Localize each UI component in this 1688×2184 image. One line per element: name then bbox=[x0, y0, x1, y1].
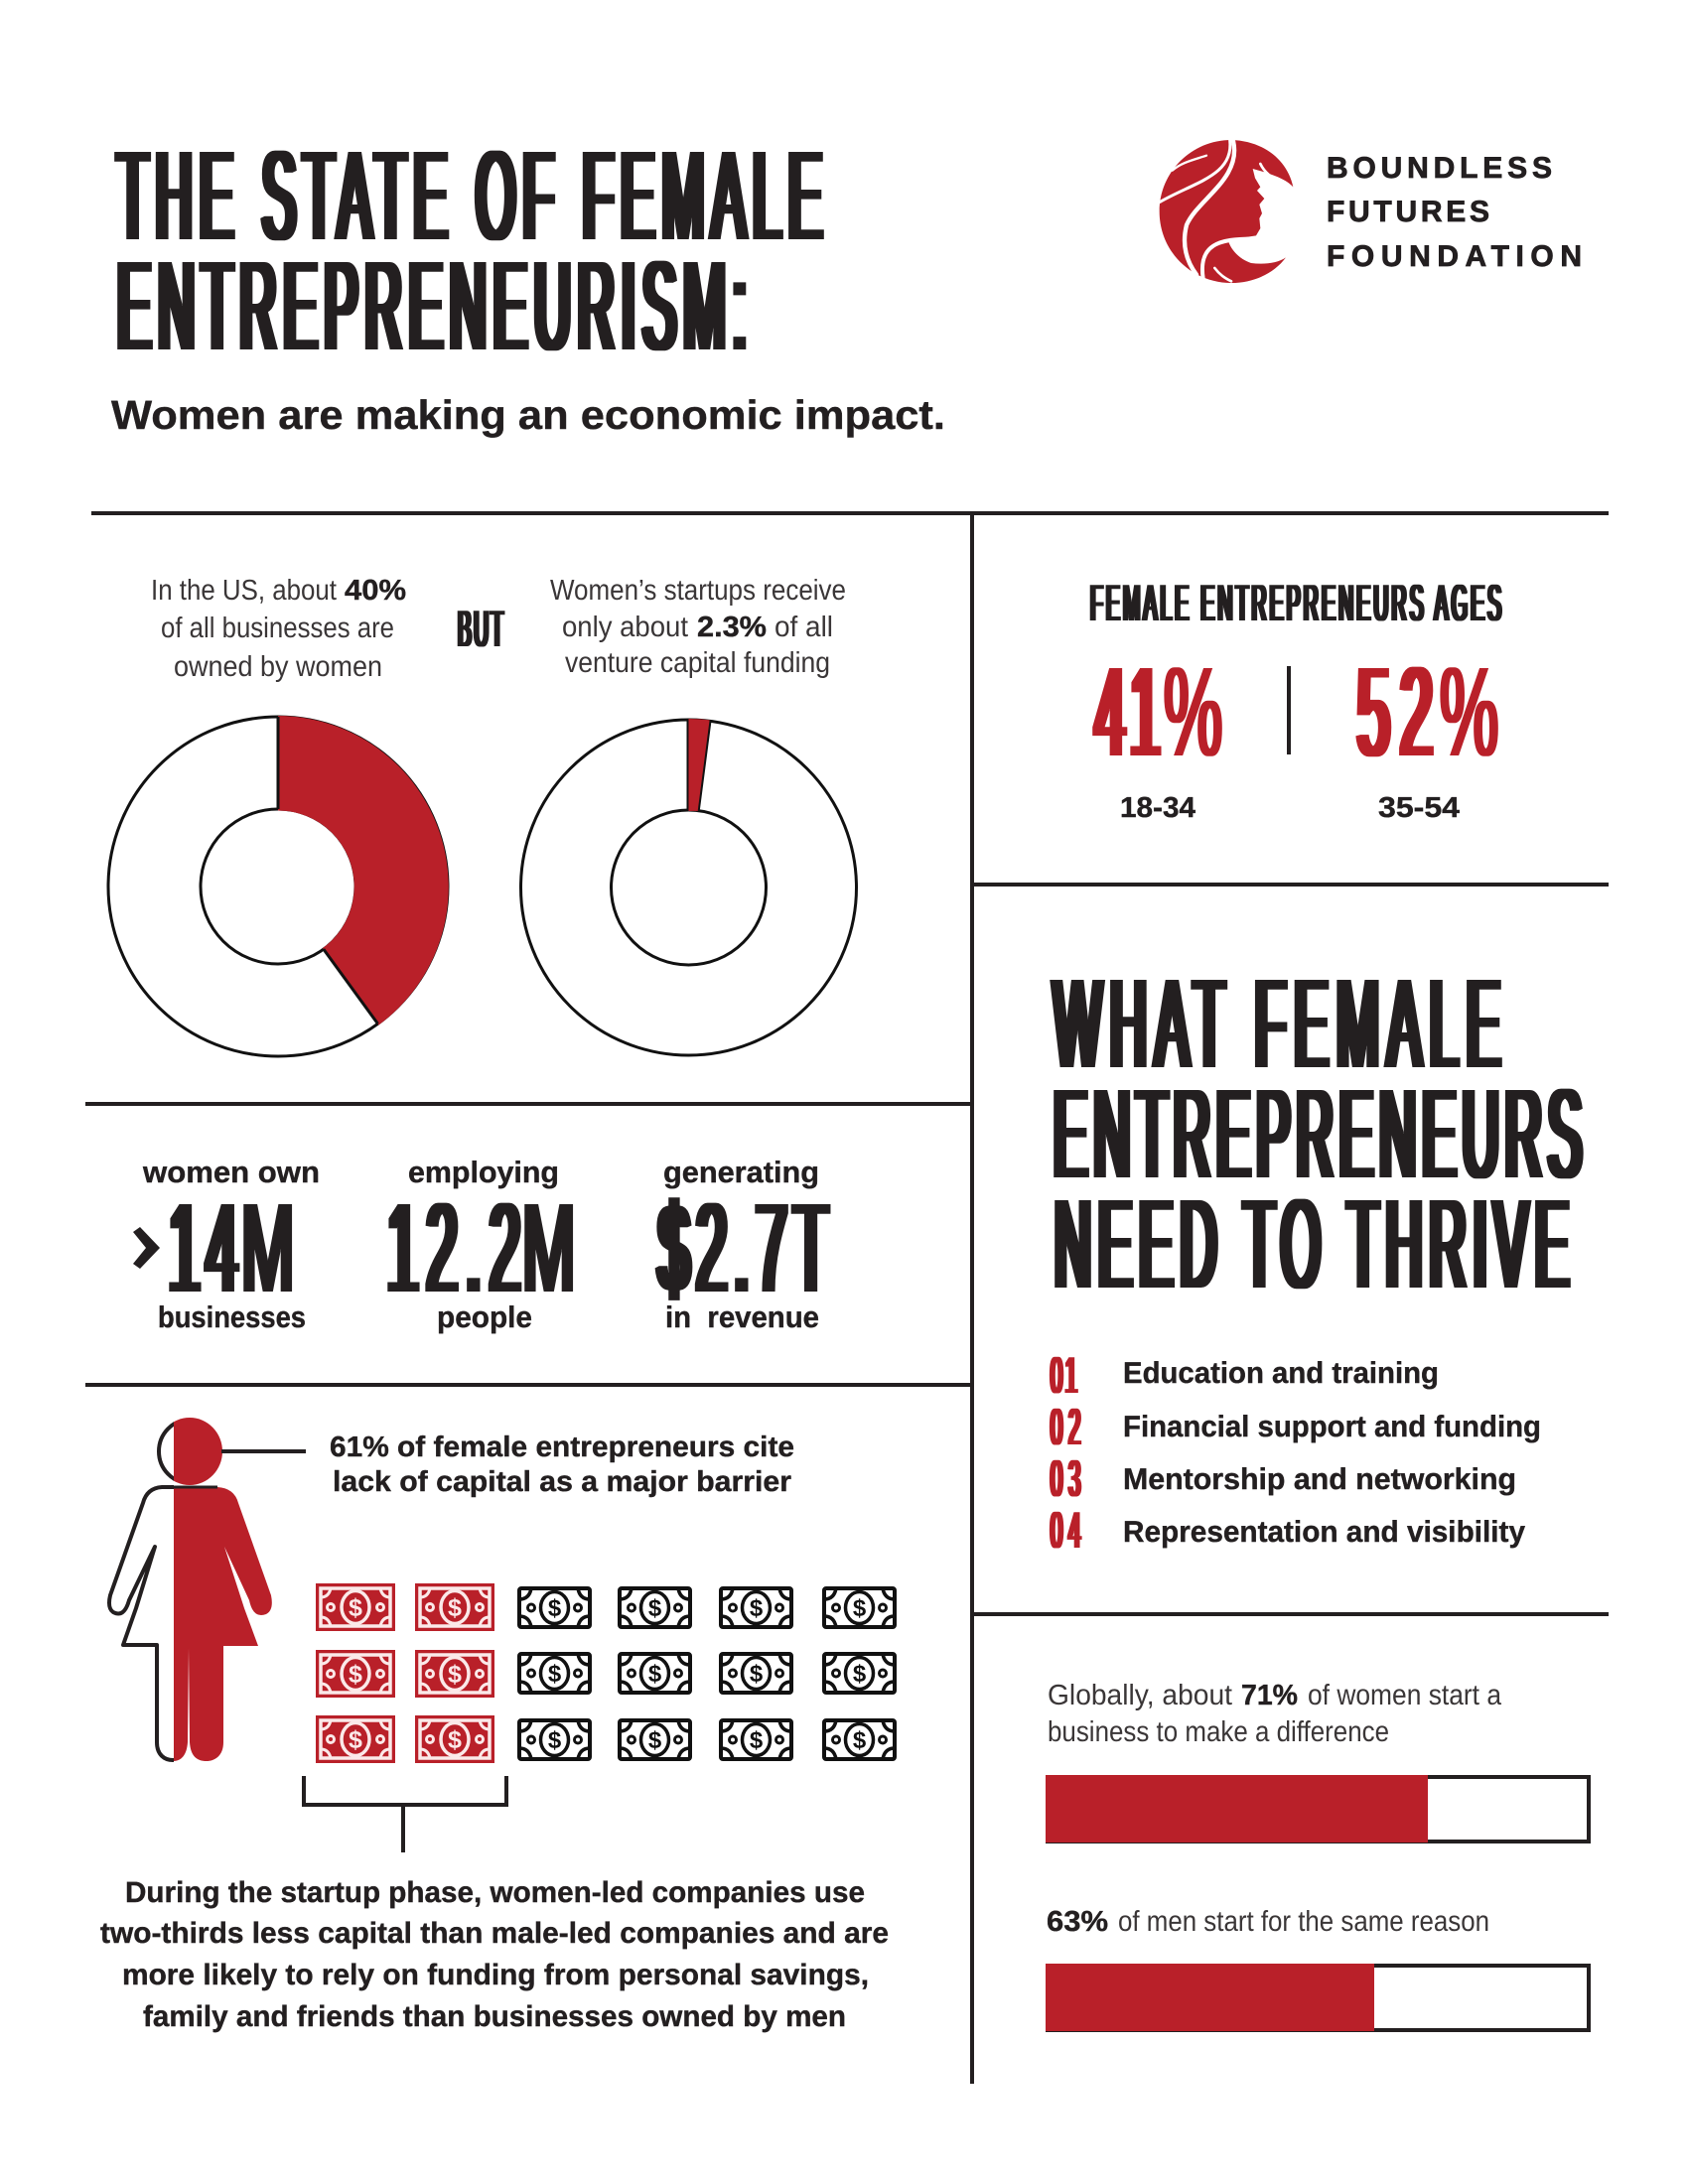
red banknotes: $ bbox=[349, 1594, 362, 1622]
item 02: Financial support and funding bbox=[1123, 1411, 1541, 1443]
item 01: 01 bbox=[1051, 1347, 1077, 1405]
heading: ages: FEMALE ENTREPRENEURS AGES bbox=[1090, 575, 1501, 632]
stat: 14M businesses: 14 bbox=[169, 1177, 237, 1319]
heading: needs: NEED TO THRIVE bbox=[1055, 1173, 1569, 1315]
item 03: 03 bbox=[1051, 1450, 1080, 1508]
icon: woman figure bbox=[109, 1418, 272, 1761]
stat: 12.2M people: 12.2 bbox=[387, 1177, 520, 1319]
item 04: Representation and visibility bbox=[1123, 1516, 1525, 1549]
stat: 52% aged 35-54 bbox=[1357, 641, 1498, 824]
text: startup capital paragraph: two-thirds less capital than male-led companies and are bbox=[100, 1917, 889, 1950]
black banknotes: $ bbox=[648, 1727, 662, 1754]
red banknotes bbox=[316, 1583, 494, 1763]
black banknotes: $ bbox=[750, 1595, 764, 1622]
black banknotes: $ bbox=[750, 1727, 764, 1754]
text: 40% of businesses: 40% bbox=[345, 575, 406, 607]
panel: what female entrepreneurs need bbox=[1051, 953, 1582, 1560]
panel: female entrepreneurs ages bbox=[1090, 575, 1501, 824]
stat: 41% aged 18-34 bbox=[1095, 641, 1222, 824]
text: 71% of women: of women start a bbox=[1308, 1680, 1502, 1711]
stat: 12.2M people: people bbox=[437, 1301, 532, 1334]
red banknotes: $ bbox=[349, 1661, 362, 1689]
stat: 12.2M people bbox=[387, 1157, 575, 1334]
text: 40% of businesses bbox=[151, 575, 406, 683]
text: 40% of businesses: In the US, about bbox=[151, 575, 337, 607]
subtitle: Women are making an economic impact. bbox=[111, 392, 945, 438]
logo wordmark: FOUNDATION bbox=[1327, 240, 1582, 273]
stat: 12.2M people: employing bbox=[408, 1157, 559, 1189]
stat: 41% aged 18-34: % bbox=[1164, 641, 1222, 783]
panel: motivation comparison bbox=[1046, 1680, 1589, 2031]
panel: capital barrier bbox=[100, 1418, 895, 2033]
item 02: 02 bbox=[1051, 1399, 1080, 1456]
stat: 41% aged 18-34: 18-34 bbox=[1120, 792, 1196, 824]
text: 71% of women bbox=[1048, 1680, 1502, 1748]
stat divider bbox=[1287, 666, 1291, 754]
title bbox=[117, 125, 822, 377]
logo wordmark: BOUNDLESS bbox=[1327, 152, 1552, 185]
stat: 14M businesses: women own bbox=[142, 1157, 320, 1189]
text: 2.3% of funding: 2.3% bbox=[697, 612, 767, 643]
stat: 52% aged 35-54: 35-54 bbox=[1378, 792, 1460, 824]
heading: needs bbox=[1054, 953, 1582, 1315]
item 01: Education and training bbox=[1123, 1357, 1439, 1390]
stat: 41% aged 18-34: 41 bbox=[1095, 641, 1160, 783]
red banknotes: $ bbox=[448, 1726, 462, 1754]
text: 2.3% of funding bbox=[550, 575, 846, 679]
stat: 2.7T revenue: generating bbox=[663, 1157, 819, 1189]
logo wordmark: FUTURES bbox=[1327, 196, 1489, 228]
black banknotes: $ bbox=[750, 1661, 764, 1688]
black banknotes: $ bbox=[548, 1595, 562, 1622]
black banknotes: $ bbox=[548, 1661, 562, 1688]
text: 71% of women: 71% bbox=[1241, 1680, 1298, 1711]
text: 2.3% of funding: venture capital funding bbox=[565, 647, 830, 679]
text: startup capital paragraph bbox=[100, 1876, 889, 2033]
black banknotes: $ bbox=[648, 1595, 662, 1622]
logo: boundless futures foundation bbox=[1160, 140, 1582, 283]
text: 2.3% of funding: of all bbox=[774, 612, 833, 643]
red banknotes: $ bbox=[448, 1661, 462, 1689]
text: 2.3% of funding: only about bbox=[562, 612, 688, 643]
grid dividers bbox=[85, 511, 1609, 2084]
list: needs bbox=[1051, 1347, 1541, 1560]
heading: needs: ENTREPRENEURS bbox=[1054, 1063, 1582, 1205]
black banknotes: $ bbox=[853, 1661, 867, 1688]
text: 2.3% of funding: Women’s startups receive bbox=[550, 575, 846, 607]
panel: ownership vs funding bbox=[108, 575, 856, 1056]
text: startup capital paragraph: more likely to rely on funding from personal savings, bbox=[122, 1959, 869, 1991]
icon: woman profile in red circle bbox=[1160, 140, 1293, 283]
text: startup capital paragraph: During the startup phase, women-led companies use bbox=[125, 1876, 865, 1909]
black banknotes: $ bbox=[853, 1595, 867, 1622]
item 03: Mentorship and networking bbox=[1123, 1463, 1516, 1496]
bar chart: 63% bbox=[1046, 1964, 1589, 2031]
icon grid: banknotes bbox=[316, 1583, 895, 1763]
donut chart: 2.3% bbox=[520, 719, 856, 1055]
item 01 bbox=[1051, 1347, 1439, 1405]
text: 40% of businesses: owned by women bbox=[174, 651, 382, 683]
item 04 bbox=[1051, 1502, 1525, 1560]
heading: needs: WHAT FEMALE bbox=[1054, 953, 1500, 1095]
stat: 14M businesses: businesses bbox=[158, 1301, 306, 1334]
title: THE STATE OF FEMALE bbox=[117, 125, 822, 267]
text: 63% of men: 63% bbox=[1047, 1906, 1108, 1938]
black banknotes: $ bbox=[853, 1727, 867, 1754]
item 03 bbox=[1051, 1450, 1516, 1508]
red banknotes: $ bbox=[448, 1594, 462, 1622]
text: 71% of women: business to make a difference bbox=[1048, 1716, 1389, 1748]
item 02 bbox=[1051, 1399, 1541, 1456]
pointer line bbox=[221, 1449, 306, 1453]
stat: 14M businesses: M bbox=[241, 1177, 294, 1319]
label: but: BUT bbox=[458, 601, 503, 658]
text: 40% of businesses: of all businesses are bbox=[161, 613, 394, 644]
title: ENTREPRENEURISM: bbox=[117, 235, 747, 377]
bracket connector bbox=[304, 1776, 506, 1852]
logo wordmark bbox=[1327, 152, 1582, 273]
black banknotes bbox=[519, 1588, 895, 1759]
stat: 2.7T revenue: $2.7T bbox=[658, 1177, 828, 1319]
text: 63% of men: of men start for the same reason bbox=[1118, 1906, 1489, 1938]
stat: 12.2M people: M bbox=[522, 1177, 575, 1319]
panel: business stats bbox=[133, 1157, 828, 1334]
text: 61% cite lack of capital bbox=[330, 1432, 794, 1498]
stat: 52% aged 35-54: 52 bbox=[1357, 641, 1433, 783]
text: startup capital paragraph: family and friends than businesses owned by men bbox=[143, 2000, 846, 2033]
donut chart: 40% bbox=[108, 716, 449, 1056]
text: 61% cite lack of capital: lack of capital as a major barrier bbox=[333, 1466, 791, 1498]
black banknotes: $ bbox=[648, 1661, 662, 1688]
stat: 52% aged 35-54: % bbox=[1440, 641, 1498, 783]
bar chart: 71% bbox=[1046, 1775, 1589, 1843]
black banknotes: $ bbox=[548, 1727, 562, 1754]
stat: 2.7T revenue: in revenue bbox=[665, 1301, 819, 1334]
stat: 14M businesses bbox=[133, 1157, 320, 1334]
red banknotes: $ bbox=[349, 1726, 362, 1754]
text: 71% of women: Globally, about bbox=[1048, 1680, 1232, 1711]
item 04: 04 bbox=[1051, 1502, 1080, 1560]
text: 61% cite lack of capital: 61% of female entrepreneurs cite bbox=[330, 1432, 794, 1463]
